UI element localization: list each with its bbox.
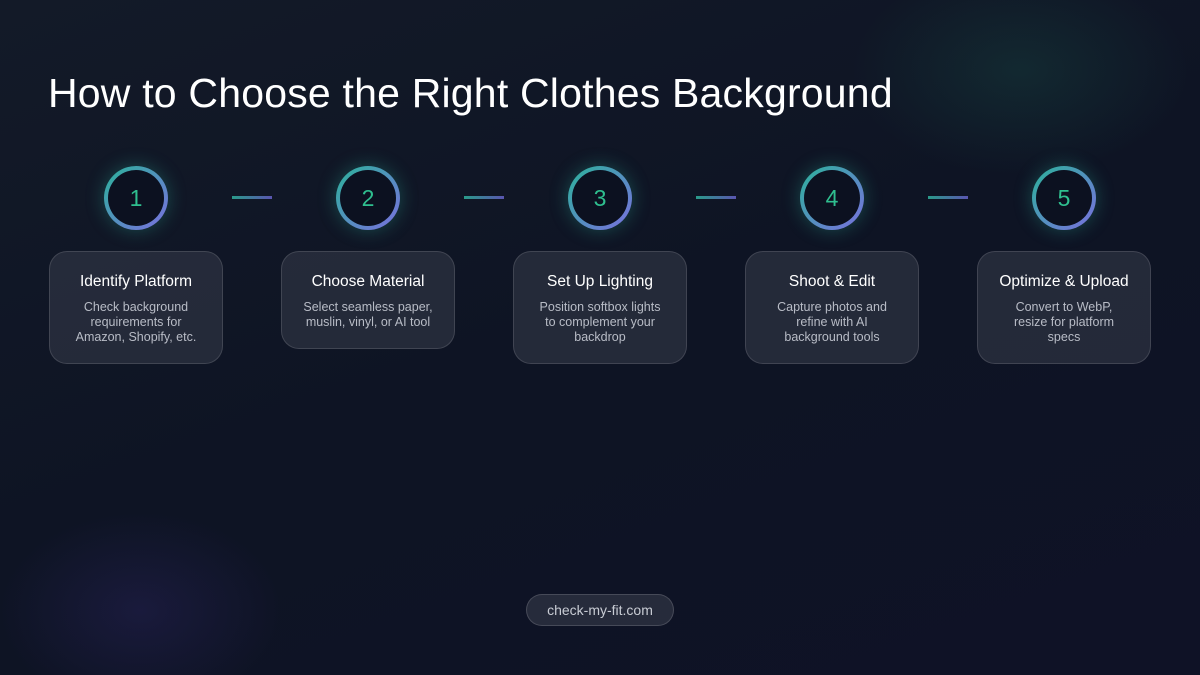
number circle 2: 2 [362, 184, 374, 210]
step 3 [513, 159, 687, 364]
footer url pill: check-my-fit.com [547, 602, 653, 618]
number circle 4: 4 [826, 184, 838, 210]
card: choose material: Select seamless paper, muslin, vinyl, or AI tool [303, 300, 433, 329]
step 4 [745, 159, 919, 364]
card: optimize & upload [977, 251, 1151, 364]
number circle 1: 1 [130, 184, 142, 210]
step 5 [977, 159, 1151, 364]
connector 2-3 [464, 196, 504, 199]
card: shoot & edit: Capture photos and refine with AI background tools [777, 300, 887, 344]
connector 4-5 [928, 196, 968, 199]
number circle 2 [336, 166, 400, 230]
number circle 5: 5 [1058, 184, 1070, 210]
number circle 4 [800, 166, 864, 230]
step 2 [281, 159, 455, 349]
card: set up lighting: Position softbox lights to complement your backdrop [540, 300, 660, 344]
card: shoot & edit: Shoot & Edit [789, 273, 875, 290]
card: identify platform: Check background requirements for Amazon, Shopify, etc. [76, 300, 196, 344]
card: shoot & edit [745, 251, 919, 364]
footer url pill [526, 594, 674, 626]
card: identify platform: Identify Platform [80, 273, 192, 290]
card: set up lighting [513, 251, 687, 364]
card: identify platform [49, 251, 223, 364]
number circle 3 [568, 166, 632, 230]
card: choose material [281, 251, 455, 349]
title: How to Choose the Right Clothes Background [48, 70, 893, 116]
step 1 [49, 159, 223, 364]
connector 1-2 [232, 196, 272, 199]
card: set up lighting: Set Up Lighting [547, 273, 653, 290]
card: optimize & upload: Optimize & Upload [999, 273, 1129, 290]
number circle 3: 3 [594, 184, 606, 210]
number circle 1 [104, 166, 168, 230]
card: optimize & upload: Convert to WebP, resize for platform specs [1014, 300, 1114, 344]
card: choose material: Choose Material [312, 273, 424, 290]
number circle 5 [1032, 166, 1096, 230]
connector 3-4 [696, 196, 736, 199]
